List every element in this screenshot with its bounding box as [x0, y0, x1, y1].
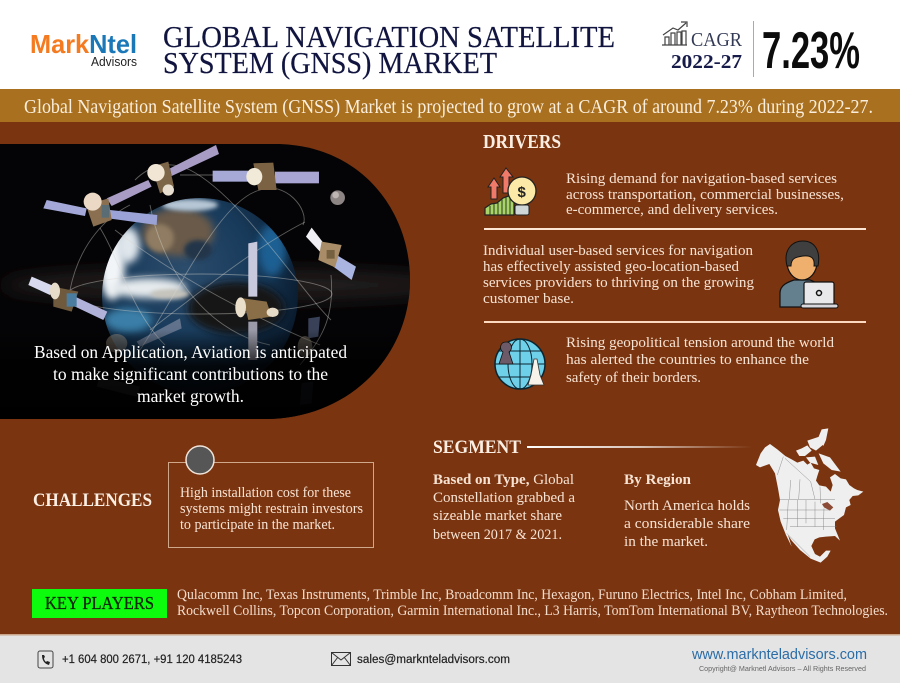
driver text 1: across transportation, commercial businesses, — [566, 187, 844, 203]
segment by type: sizeable market share — [433, 508, 562, 524]
challenge text — [180, 485, 363, 533]
email: sales@marknteladvisors.com — [357, 654, 510, 666]
driver text 2: Individual user-based services for navigation — [483, 243, 753, 259]
driver text 1 — [566, 171, 844, 218]
driver text 2: services providers to thriving on the growing — [483, 275, 754, 291]
satellite: lower right (dim) — [298, 316, 320, 384]
title: GLOBAL NAVIGATION SATELLITE — [163, 20, 615, 54]
logo: MarkNtel — [30, 29, 137, 59]
summary band — [0, 89, 900, 122]
key players list — [177, 587, 888, 619]
key players list: Qulacomm Inc, Texas Instruments, Trimble Inc, Broadcomm Inc, Hexagon, Furuno Electrics, Intel Inc, Cobham Limited, — [177, 587, 847, 603]
icon: rising arrows and bulb: $ — [518, 184, 526, 201]
driver text 1: e-commerce, and delivery services. — [566, 202, 778, 218]
driver text 2 — [483, 243, 754, 307]
segment by region: a considerable share — [624, 516, 750, 532]
heading: segment: SEGMENT — [433, 438, 522, 458]
driver text 3: has alerted the countries to enhance the — [566, 352, 809, 368]
satellites — [28, 145, 356, 405]
challenge text: High installation cost for these — [180, 485, 351, 501]
logo: Advisors — [91, 54, 137, 69]
challenge box — [168, 462, 374, 548]
segment by region: in the market. — [624, 534, 708, 550]
phone numbers: +1 604 800 2671, +91 120 4185243 — [62, 654, 242, 666]
panel: segment — [433, 428, 863, 563]
website: www.marknteladvisors.com — [691, 646, 867, 663]
satellite: left — [28, 277, 107, 320]
panel: challenges — [33, 446, 374, 548]
CAGR label — [671, 29, 743, 73]
footer — [0, 634, 900, 683]
earth — [99, 198, 298, 394]
driver text 3 — [566, 335, 834, 386]
satellite: upper left — [107, 145, 219, 206]
icon: growth chart — [662, 22, 687, 45]
photo caption: market growth. — [137, 386, 244, 406]
segment by region: By Region — [624, 472, 692, 488]
satellite: centre — [235, 242, 279, 360]
photo caption — [34, 342, 347, 406]
orbits — [68, 165, 332, 365]
photo caption: to make significant contributions to the — [53, 364, 328, 384]
segment by type: between 2017 & 2021. — [433, 527, 562, 543]
icon: phone — [38, 651, 53, 668]
satellite: far left top — [43, 193, 157, 227]
satellite: top right — [213, 163, 319, 190]
icon: person with laptop — [780, 241, 838, 308]
driver text 3: safety of their borders. — [566, 370, 701, 386]
satellite: right — [306, 228, 356, 280]
title: SYSTEM (GNSS) MARKET — [163, 46, 497, 80]
panel: key players — [32, 587, 888, 619]
header — [0, 0, 900, 89]
challenge text: systems might restrain investors — [180, 501, 363, 517]
icon: rising arrows and bulb — [485, 168, 536, 215]
icon: mail — [332, 652, 350, 666]
driver text 2: customer base. — [483, 291, 574, 307]
segment by type: Constellation grabbed a — [433, 490, 575, 506]
key players badge: KEY PLAYERS — [45, 593, 154, 613]
icon: challenge marker — [186, 446, 214, 474]
segment by region: North America holds — [624, 498, 750, 514]
driver text 2: has effectively assisted geo-location-based — [483, 259, 739, 275]
CAGR label: CAGR — [691, 29, 743, 51]
heading: challenges: CHALLENGES — [33, 491, 152, 511]
moon — [330, 190, 345, 205]
key players badge — [32, 589, 167, 618]
panel: drivers — [483, 132, 866, 389]
segment by type: Based on Type, Global — [433, 472, 574, 488]
segment by region — [624, 472, 750, 550]
satellite: lower left (dim) — [98, 318, 182, 388]
segment by type — [433, 472, 575, 543]
title — [163, 20, 615, 80]
driver text 3: Rising geopolitical tension around the world — [566, 335, 834, 351]
icon: globe and chess pieces — [495, 339, 545, 389]
panel: satellite photo — [0, 144, 410, 419]
driver text 1: Rising demand for navigation-based services — [566, 171, 837, 187]
challenge text: to participate in the market. — [180, 517, 335, 533]
heading: drivers: DRIVERS — [483, 132, 561, 153]
map: North America — [756, 428, 863, 563]
photo caption: Based on Application, Aviation is anticipated — [34, 342, 347, 362]
copyright: Copyright@ Marknetl Advisors – All Rights Reserved — [699, 666, 866, 673]
CAGR label: 2022-27 — [671, 51, 742, 73]
